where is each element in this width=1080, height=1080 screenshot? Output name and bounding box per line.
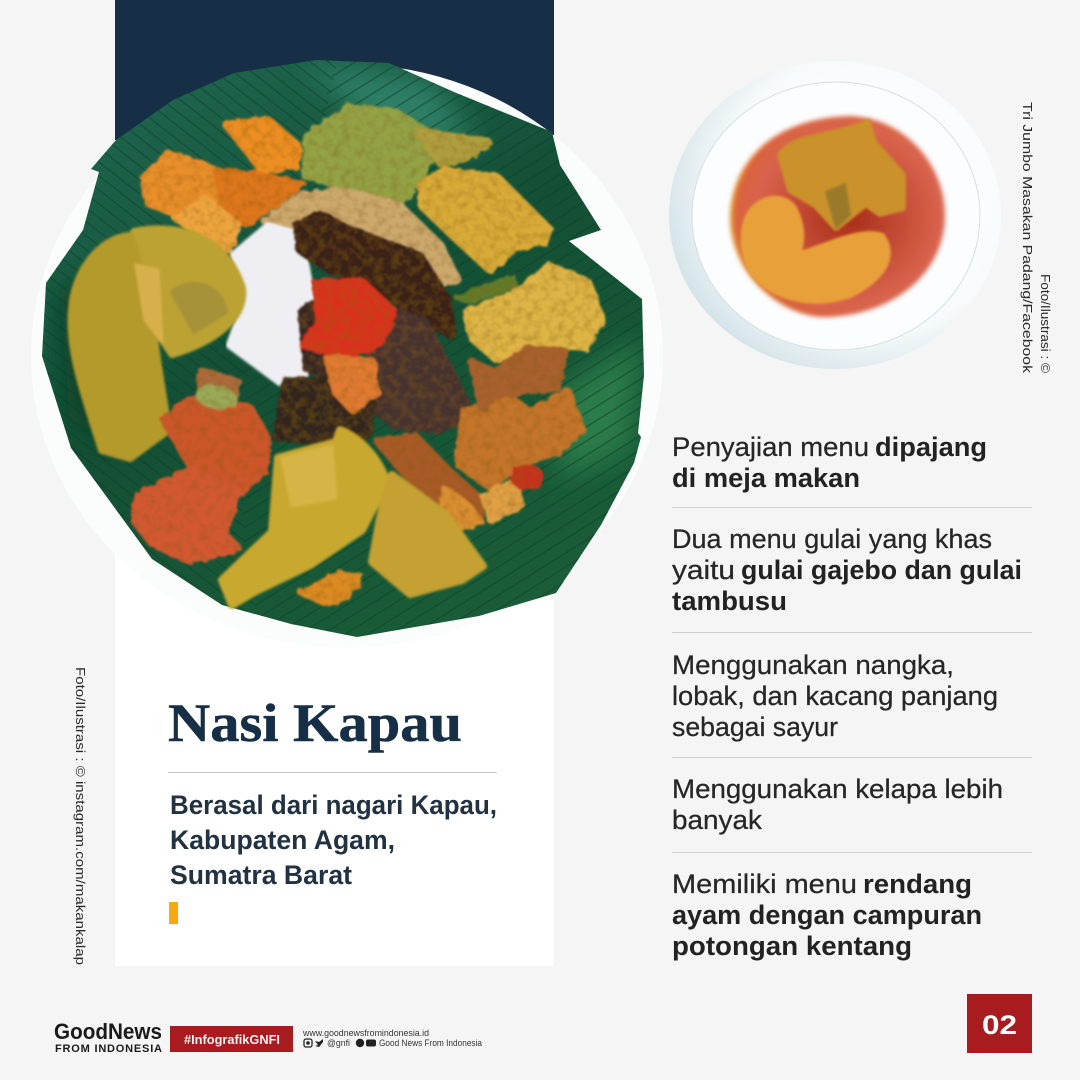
origin text (170, 790, 497, 890)
hashtag badge: #InfografikGNFI (184, 1032, 280, 1047)
list item 1: Penyajian menu (672, 432, 869, 462)
list item 1: di meja makan (672, 463, 860, 493)
footer links (302, 1028, 482, 1048)
food: small red chilli (510, 464, 544, 490)
list item 2: tambusu (672, 586, 787, 616)
food: red shrimp (164, 398, 268, 496)
list item 3: lobak, dan kacang panjang (672, 681, 998, 711)
banana leaf (30, 50, 660, 650)
photo credit right (1020, 102, 1053, 374)
footer logo: FROM INDONESIA (55, 1043, 162, 1055)
food: jackfruit upper (422, 170, 550, 270)
list item 2 (672, 524, 1022, 616)
footer logo: GoodNews (54, 1019, 162, 1044)
footer links: www.goodnewsfromindonesia.id (302, 1028, 429, 1038)
food: meats and sides (134, 214, 582, 605)
food: white rice (230, 226, 312, 382)
list item 4: banyak (672, 805, 763, 835)
food: green sambal (305, 108, 440, 205)
food: green petai (194, 382, 238, 412)
footer links: @gnfi (327, 1038, 350, 1048)
divider (168, 772, 497, 773)
list item 4: Menggunakan kelapa lebih (672, 774, 1003, 804)
list item 5 (672, 869, 982, 961)
bowl (669, 61, 1001, 369)
food: orange tofu (144, 120, 302, 250)
food: yellow rice (266, 191, 458, 295)
origin text: Sumatra Barat (170, 860, 352, 890)
list item 3: sebagai sayur (672, 712, 838, 742)
origin text: Berasal dari nagari Kapau, (170, 790, 497, 820)
curry sauce (730, 116, 945, 317)
list item 5: potongan kentang (672, 931, 912, 961)
gajebo meat (780, 122, 903, 228)
photo credit right: Tri Jumbo Masakan Padang/Facebook (1020, 102, 1035, 374)
food: yellow gulai (222, 430, 483, 605)
list item 2: gulai gajebo dan gulai (741, 555, 1022, 585)
list item 3: Menggunakan nangka, (672, 650, 954, 680)
food: textured dishes (144, 108, 602, 362)
food: red chilli sambal (302, 280, 396, 354)
page number badge: 02 (982, 1010, 1017, 1040)
footer links: Good News From Indonesia (379, 1038, 482, 1048)
food: orange piece bottom (298, 572, 362, 605)
plate (31, 64, 663, 648)
food: jackfruit right (466, 266, 602, 362)
list item 1 (672, 432, 987, 493)
tambusu sausage (744, 199, 888, 301)
photo credit left: Foto/Ilustrasi : © instagram.com/makankalap (73, 667, 88, 965)
footer logo (54, 1019, 162, 1055)
food: rendang (296, 214, 452, 336)
origin text: Kabupaten Agam, (170, 825, 395, 855)
list item 5: ayam dengan campuran (672, 900, 982, 930)
accent bar (169, 902, 178, 924)
list item 5: Memiliki menu (672, 869, 857, 899)
page number badge (967, 994, 1032, 1053)
food: green bean (456, 276, 516, 302)
list item 4 (672, 774, 1003, 835)
photo credit right: Foto/Ilustrasi : © (1038, 274, 1053, 373)
food: yellow chicken (71, 229, 242, 458)
list item 3 (672, 650, 998, 742)
list item 1: dipajang (875, 432, 987, 462)
image: nasi kapau plate (30, 50, 663, 650)
hashtag badge (170, 1026, 293, 1052)
list item 2: Dua menu gulai yang khas (672, 524, 992, 554)
panel: title card (115, 0, 554, 966)
list item 5: rendang (863, 869, 972, 899)
list item 2: yaitu (672, 555, 735, 585)
image: gulai bowl (669, 61, 1001, 369)
food: potato pieces (378, 436, 480, 526)
title: Nasi Kapau (168, 693, 462, 753)
food: dark beef (362, 305, 472, 430)
